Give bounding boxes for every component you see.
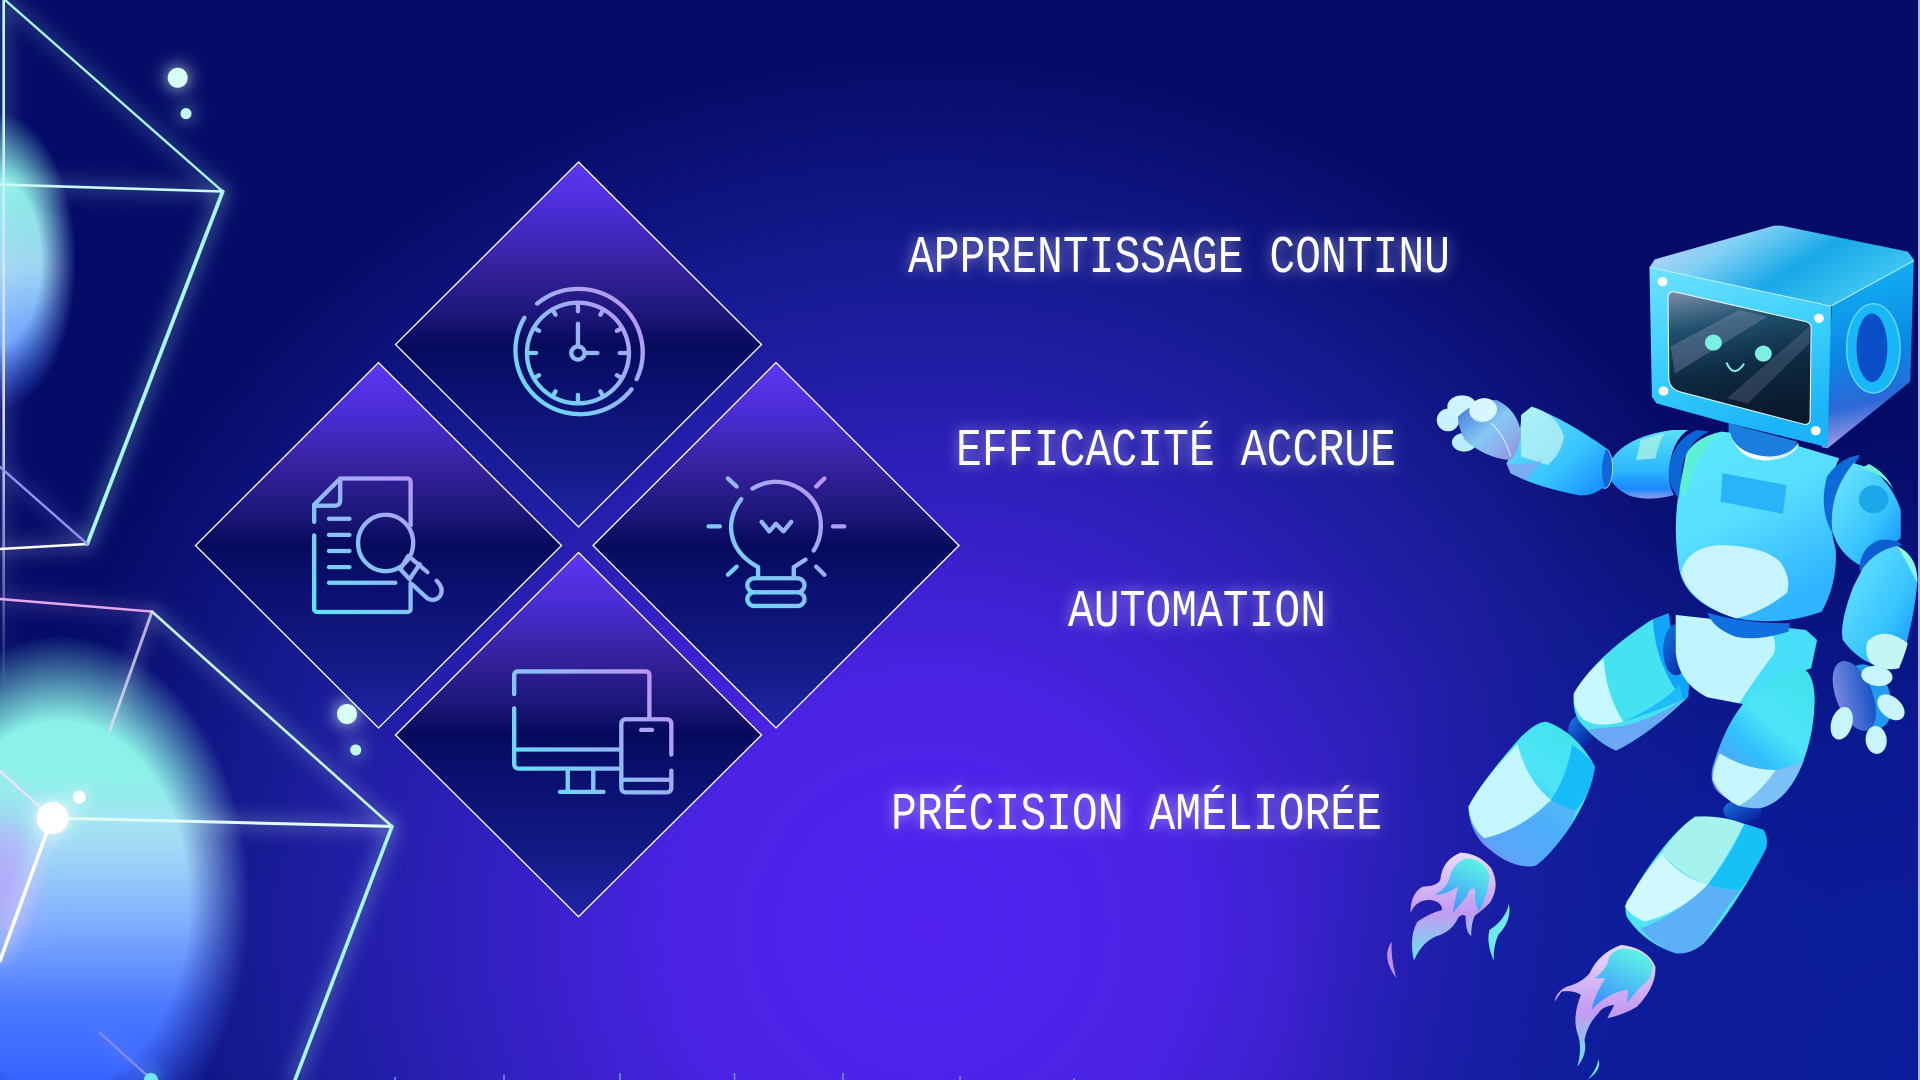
- right thigh: [1712, 668, 1815, 808]
- head: screen: [1668, 292, 1811, 424]
- glow blob: lower left: [0, 630, 260, 1080]
- panel: document diamond: [196, 363, 562, 728]
- wireframe: upper cube: [0, 0, 223, 690]
- panel: bulb diamond: [593, 363, 959, 728]
- glowing dots: [37, 68, 361, 1080]
- left leg and flames: [1387, 613, 1910, 1079]
- right hand: [1824, 656, 1910, 755]
- head: [1649, 226, 1914, 448]
- illustration: robot: [1387, 226, 1917, 1079]
- hip: [1676, 615, 1817, 705]
- right shin: [1625, 816, 1767, 953]
- text: automation: AUTOMATION: [1068, 582, 1326, 642]
- wireframe: lower cube: [0, 599, 392, 1080]
- left thigh: [1574, 613, 1690, 751]
- head: ear ring: [1847, 304, 1900, 393]
- torso: [1676, 432, 1839, 621]
- glow blob: upper left: [0, 115, 74, 408]
- icon: light bulb: [709, 478, 844, 606]
- text: efficacité accrue: EFFICACITÉ ACCRUE: [956, 420, 1396, 481]
- panel: clock diamond: [396, 162, 762, 527]
- text: apprentissage continu: APPRENTISSAGE CONTINU: [908, 228, 1450, 288]
- icon: document with magnifier: [314, 478, 442, 612]
- left arm: upper arm: [1606, 430, 1688, 499]
- neck: [1729, 423, 1799, 462]
- joint: left knee: [1568, 715, 1594, 746]
- right arm: elbow: [1859, 540, 1903, 572]
- waist: [1707, 613, 1790, 638]
- left arm: elbow: [1597, 448, 1613, 488]
- text: précision améliorée: PRÉCISION AMÉLIORÉE: [891, 784, 1382, 845]
- icon: clock: [515, 289, 643, 414]
- right edge line: [1918, 0, 1920, 1080]
- icon: monitor and phone: [514, 671, 671, 792]
- glow blob: lavender edge: [0, 820, 26, 940]
- right arm: forearm: [1842, 546, 1917, 669]
- head: bolts: [1658, 277, 1824, 435]
- joint: hip: [1663, 625, 1688, 675]
- left arm: shoulder joint: [1669, 430, 1709, 498]
- bottom tick marks: [395, 1073, 1074, 1080]
- panel: devices diamond: [396, 552, 762, 917]
- left arm: forearm: [1506, 407, 1606, 495]
- joint: right knee: [1723, 799, 1762, 822]
- left hand: [1437, 394, 1521, 460]
- right arm: joint: [1824, 455, 1860, 535]
- right arm: upper arm: [1832, 463, 1901, 567]
- flame: left foot: [1387, 853, 1510, 978]
- flame: right foot: [1555, 945, 1655, 1079]
- left shin: [1468, 722, 1595, 866]
